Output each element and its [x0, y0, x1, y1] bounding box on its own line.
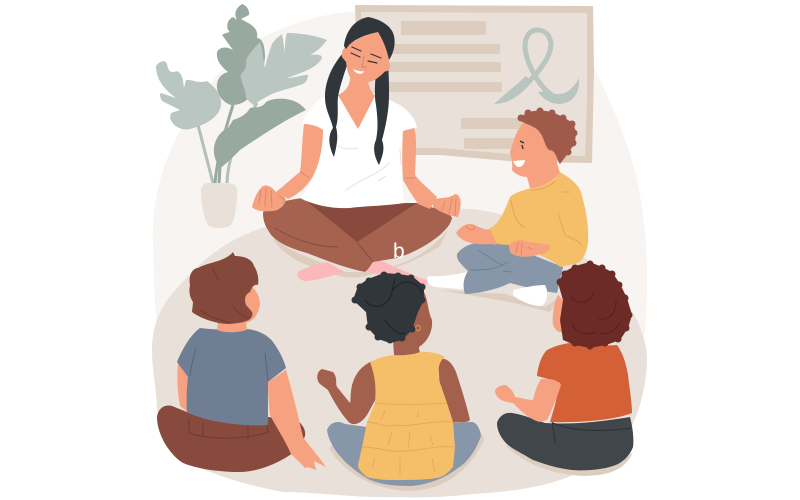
teacher hair top — [344, 17, 395, 60]
leaf: right pale — [241, 33, 327, 105]
boy sock left — [427, 272, 470, 290]
grey-shirt boy neck — [217, 322, 247, 332]
boy sock right — [513, 285, 547, 306]
girl dress — [358, 352, 455, 480]
grey-shirt boy left arm — [177, 363, 190, 412]
floor blob — [152, 208, 647, 497]
plant pot — [201, 183, 237, 228]
orange-shirt arm and hand — [495, 379, 561, 422]
grey-shirt boy belt lines — [189, 418, 268, 440]
orange-shirt shadow — [505, 445, 633, 476]
grey-shirt boy trousers — [157, 405, 305, 472]
teacher right hand finger lines — [405, 178, 456, 216]
grey-shirt boy hair — [189, 252, 258, 324]
teacher shirt — [300, 93, 417, 208]
leaf: left pale — [156, 61, 221, 129]
girl dress ruffle lines — [362, 403, 455, 475]
girl shadow — [329, 432, 484, 491]
teacher left hand finger lines — [259, 172, 310, 208]
boy hand lines — [466, 226, 532, 255]
grey-shirt boy sleeve lines — [190, 349, 268, 380]
boy trousers — [457, 243, 563, 294]
teacher left hand — [252, 185, 286, 211]
teacher — [252, 17, 461, 290]
icon: awareness ribbon — [494, 30, 579, 104]
orange-shirt trouser lines — [552, 420, 631, 442]
grey-shirt boy shirt — [177, 328, 286, 425]
girl trousers — [327, 422, 481, 486]
grey-shirt boy hair lines — [200, 268, 250, 323]
girl earring — [416, 326, 420, 330]
orange-shirt trousers — [497, 413, 633, 470]
teacher left braid — [325, 52, 348, 157]
boy trouser lines — [470, 250, 512, 272]
boy hair — [518, 108, 578, 164]
teacher right arm — [402, 128, 437, 209]
plant stems — [198, 103, 257, 183]
leaf: lower dark — [214, 99, 306, 168]
girl left arm and hand — [317, 361, 378, 424]
girl hair curl lines — [365, 278, 422, 333]
teacher left foot — [297, 262, 345, 281]
orange-shirt shirt — [537, 343, 632, 422]
orange-shirt hair — [556, 260, 632, 350]
teacher face — [342, 31, 389, 83]
boy shadow — [440, 290, 560, 312]
orange-shirt hair curls — [570, 292, 620, 334]
teacher trouser crease lines — [275, 228, 373, 262]
background blob — [153, 11, 647, 360]
teacher eyes and smile — [351, 47, 381, 74]
child: girl in yellow dress — [317, 272, 484, 491]
child: child in orange shirt — [495, 260, 633, 476]
girl right arm — [438, 359, 470, 423]
boy face and neck — [510, 123, 566, 188]
girl hair — [352, 272, 426, 344]
boy sweater — [488, 172, 588, 267]
orange-shirt face — [553, 295, 565, 332]
teacher left arm — [276, 124, 323, 199]
teacher shirt fold lines — [338, 146, 401, 191]
teacher right hand — [433, 194, 461, 217]
teacher ear — [380, 60, 390, 72]
boy arm and hands — [456, 224, 497, 245]
teacher trousers — [263, 198, 452, 272]
child: boy in grey shirt — [157, 252, 326, 472]
boy in yellow sweater — [427, 108, 588, 312]
boy sweater lines — [511, 181, 581, 245]
stray letter label: b — [393, 240, 405, 263]
poster text bars — [384, 21, 531, 149]
teacher pants shadow — [273, 230, 448, 278]
boy ear — [546, 150, 558, 164]
teacher right foot — [365, 261, 428, 290]
plant — [156, 4, 327, 228]
boy eye — [520, 141, 524, 149]
boy smile — [513, 160, 525, 167]
grey-shirt boy right arm — [268, 370, 326, 470]
teacher trousers dark fold — [303, 198, 417, 242]
leaf: top dark — [217, 4, 265, 105]
poster board — [355, 5, 594, 163]
teacher right braid — [374, 66, 389, 165]
boy front hand — [509, 240, 550, 257]
girl skin neck and head — [393, 292, 432, 356]
teacher neck and chest — [338, 78, 375, 129]
grey-shirt boy ear and cheek — [245, 285, 260, 323]
